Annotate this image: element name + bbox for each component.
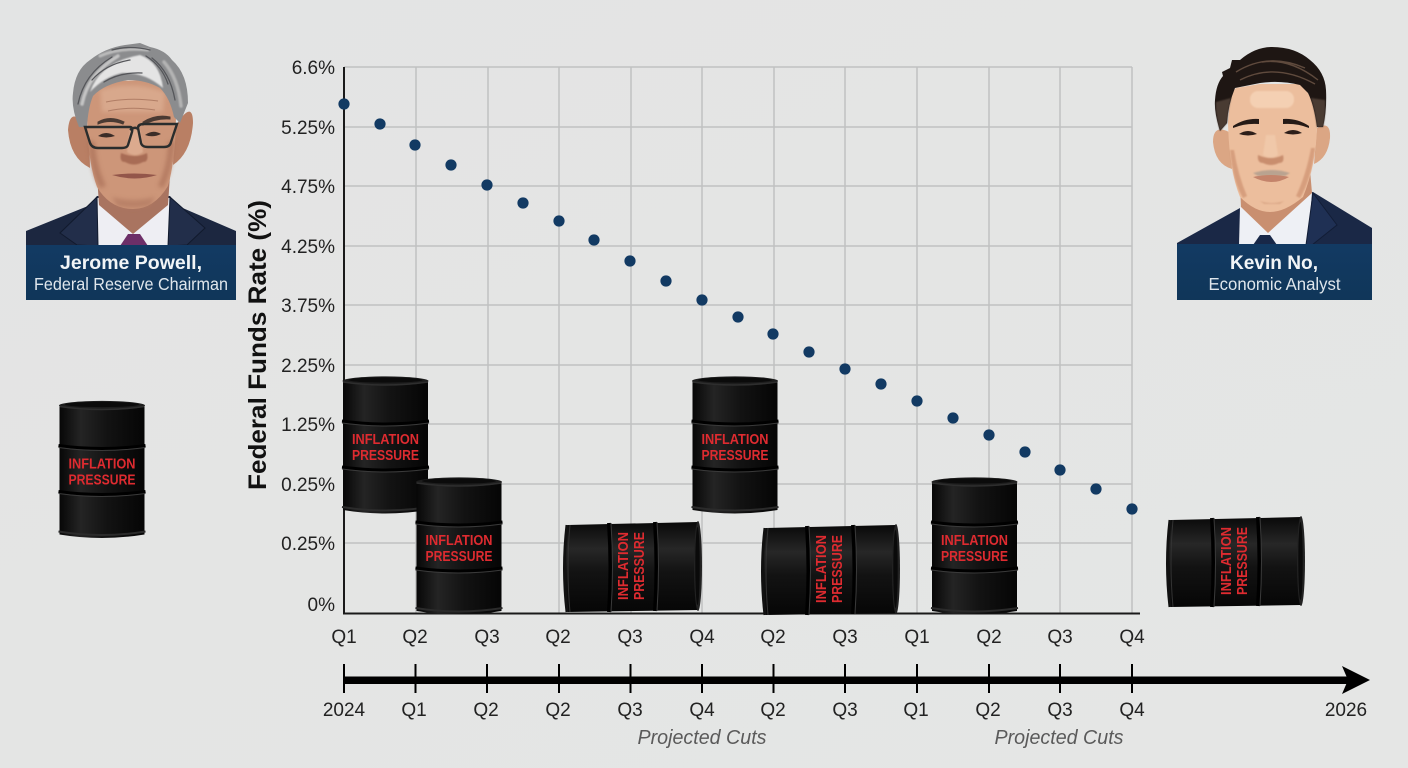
barrel: inflation pressure, tipped on side far right <box>1168 516 1305 607</box>
x-axis quarter labels: Q2 <box>402 627 428 648</box>
nose <box>1258 135 1284 165</box>
chart: federal funds rate <box>244 58 1145 648</box>
neck <box>97 175 170 234</box>
barrel: inflation pressure, first column: PRESSURE <box>352 448 419 464</box>
portrait: Kevin No <box>1177 47 1372 245</box>
timeline labels: Q1 <box>401 700 427 721</box>
barrel: inflation pressure, first column <box>342 376 429 514</box>
timeline labels: Q2 <box>760 700 786 721</box>
timeline labels <box>323 700 1367 721</box>
eyebrows <box>98 116 170 125</box>
x-axis quarter labels: Q1 <box>904 627 930 648</box>
ears <box>1213 126 1330 169</box>
eyebrows <box>1233 119 1309 128</box>
y-axis tick labels: 2.25% <box>281 356 335 377</box>
x-axis quarter labels: Q2 <box>545 627 571 648</box>
hair strands <box>1236 61 1318 84</box>
timeline labels: Q2 <box>545 700 571 721</box>
chart grid <box>344 67 1132 613</box>
lips <box>1253 175 1289 182</box>
barrel: inflation pressure, far left: PRESSURE <box>68 472 136 488</box>
timeline labels: Q2 <box>473 700 499 721</box>
annotation: projected cuts, first: Projected Cuts <box>638 727 766 749</box>
barrel: inflation pressure, far left: INFLATION <box>68 456 136 472</box>
barrel: inflation pressure, right column: INFLATION <box>941 533 1008 549</box>
y-axis tick labels: 1.25% <box>281 415 335 436</box>
barrel: inflation pressure, tipped on side middle <box>762 524 900 615</box>
shirt <box>1239 193 1312 245</box>
timeline labels: Q3 <box>617 700 643 721</box>
portrait: Jerome Powell <box>26 43 236 246</box>
y-axis tick labels: 3.75% <box>281 296 335 317</box>
timeline labels: Q2 <box>975 700 1001 721</box>
mouth <box>112 174 157 178</box>
y-axis tick labels: 5.25% <box>281 118 335 139</box>
barrel: inflation pressure, tipped on side <box>564 521 702 612</box>
ears <box>68 112 193 168</box>
suit <box>26 196 236 246</box>
x-axis quarter labels: Q4 <box>689 627 715 648</box>
y-axis tick labels: 6.6% <box>292 58 335 79</box>
necktie <box>120 234 148 246</box>
jaw shading <box>1230 148 1315 204</box>
y-axis title: Federal Funds Rate (%) <box>244 200 272 490</box>
nose <box>120 130 148 164</box>
barrel: inflation pressure, tipped on side middle: INFLATION <box>814 535 830 603</box>
y-axis tick labels: 4.75% <box>281 177 335 198</box>
necktie <box>1253 235 1277 245</box>
barrel: inflation pressure, tipped on side middle: PRESSURE <box>830 535 846 603</box>
barrel: inflation pressure, second column: PRESSURE <box>426 549 493 565</box>
x-axis quarter labels: Q4 <box>1119 627 1145 648</box>
y-axis tick labels: 4.25% <box>281 237 335 258</box>
y-axis tick labels <box>281 58 335 616</box>
x-axis quarter labels: Q1 <box>331 627 357 648</box>
forehead lines <box>106 99 158 111</box>
hair <box>73 43 188 127</box>
face highlights and shading <box>88 85 175 208</box>
barrel: inflation pressure, second column <box>416 477 502 614</box>
timeline labels: Q4 <box>1119 700 1145 721</box>
annotation: projected cuts, second: Projected Cuts <box>994 727 1124 749</box>
barrel: inflation pressure, tipped on side: PRESSURE <box>632 532 648 600</box>
x-axis quarter labels: Q3 <box>832 627 858 648</box>
timeline labels: Q3 <box>1047 700 1073 721</box>
eyes <box>1239 130 1302 136</box>
upper lip shadow <box>1253 170 1290 176</box>
forehead highlight <box>1250 91 1294 108</box>
timeline labels: Q4 <box>689 700 715 721</box>
barrel: inflation pressure, upper middle: PRESSURE <box>702 448 769 464</box>
x-axis quarter labels: Q3 <box>617 627 643 648</box>
timeline labels: Q3 <box>832 700 858 721</box>
x-axis quarter labels <box>331 627 1145 648</box>
rate dots <box>338 98 1138 515</box>
barrel: inflation pressure, upper middle <box>692 376 778 514</box>
y-axis tick labels: 0.25% <box>281 534 335 555</box>
neck <box>1240 170 1312 233</box>
x-axis quarter labels: Q2 <box>760 627 786 648</box>
barrel: inflation pressure, first column: INFLATION <box>352 432 419 448</box>
x-axis quarter labels: Q2 <box>976 627 1002 648</box>
barrel: inflation pressure, right column: PRESSURE <box>941 549 1008 565</box>
lapel right <box>1306 193 1337 245</box>
name banner: Jerome Powell: Jerome Powell, <box>60 252 202 274</box>
barrel: inflation pressure, tipped on side: INFLATION <box>616 532 632 600</box>
name banner: Jerome Powell: Federal Reserve Chairman <box>34 274 228 294</box>
barrel: inflation pressure, upper middle: INFLATION <box>702 432 768 448</box>
shirt <box>96 198 170 246</box>
face <box>87 80 176 209</box>
x-axis quarter labels: Q3 <box>1047 627 1073 648</box>
barrel: inflation pressure, right column <box>931 477 1018 614</box>
suit <box>1177 192 1372 245</box>
barrel: inflation pressure, tipped on side far right: INFLATION <box>1219 527 1235 595</box>
y-axis tick labels: 0.25% <box>281 475 335 496</box>
name banner: Jerome Powell <box>26 245 236 300</box>
barrel: inflation pressure, far left <box>58 401 146 538</box>
timeline labels: 2024 <box>323 700 366 721</box>
timeline arrow <box>344 664 1370 694</box>
hair side fade <box>1216 98 1325 131</box>
barrel: inflation pressure, second column: INFLATION <box>426 533 492 549</box>
eyes <box>98 132 161 138</box>
glasses <box>85 124 177 148</box>
name banner: Kevin No: Kevin No, <box>1230 252 1318 274</box>
timeline labels: 2026 <box>1325 700 1367 721</box>
lapels <box>60 197 205 246</box>
chart axes <box>344 67 1140 614</box>
hair dark strands <box>78 48 175 104</box>
hair highlights <box>82 49 181 106</box>
x-axis quarter labels: Q3 <box>474 627 500 648</box>
timeline labels: Q1 <box>903 700 929 721</box>
name banner: Kevin No: Economic Analyst <box>1208 274 1341 294</box>
barrel: inflation pressure, tipped on side far right: PRESSURE <box>1235 527 1251 595</box>
y-axis tick labels: 0% <box>308 595 335 616</box>
name banner: Kevin No <box>1177 244 1372 300</box>
hair <box>1215 47 1326 131</box>
face <box>1228 84 1317 212</box>
